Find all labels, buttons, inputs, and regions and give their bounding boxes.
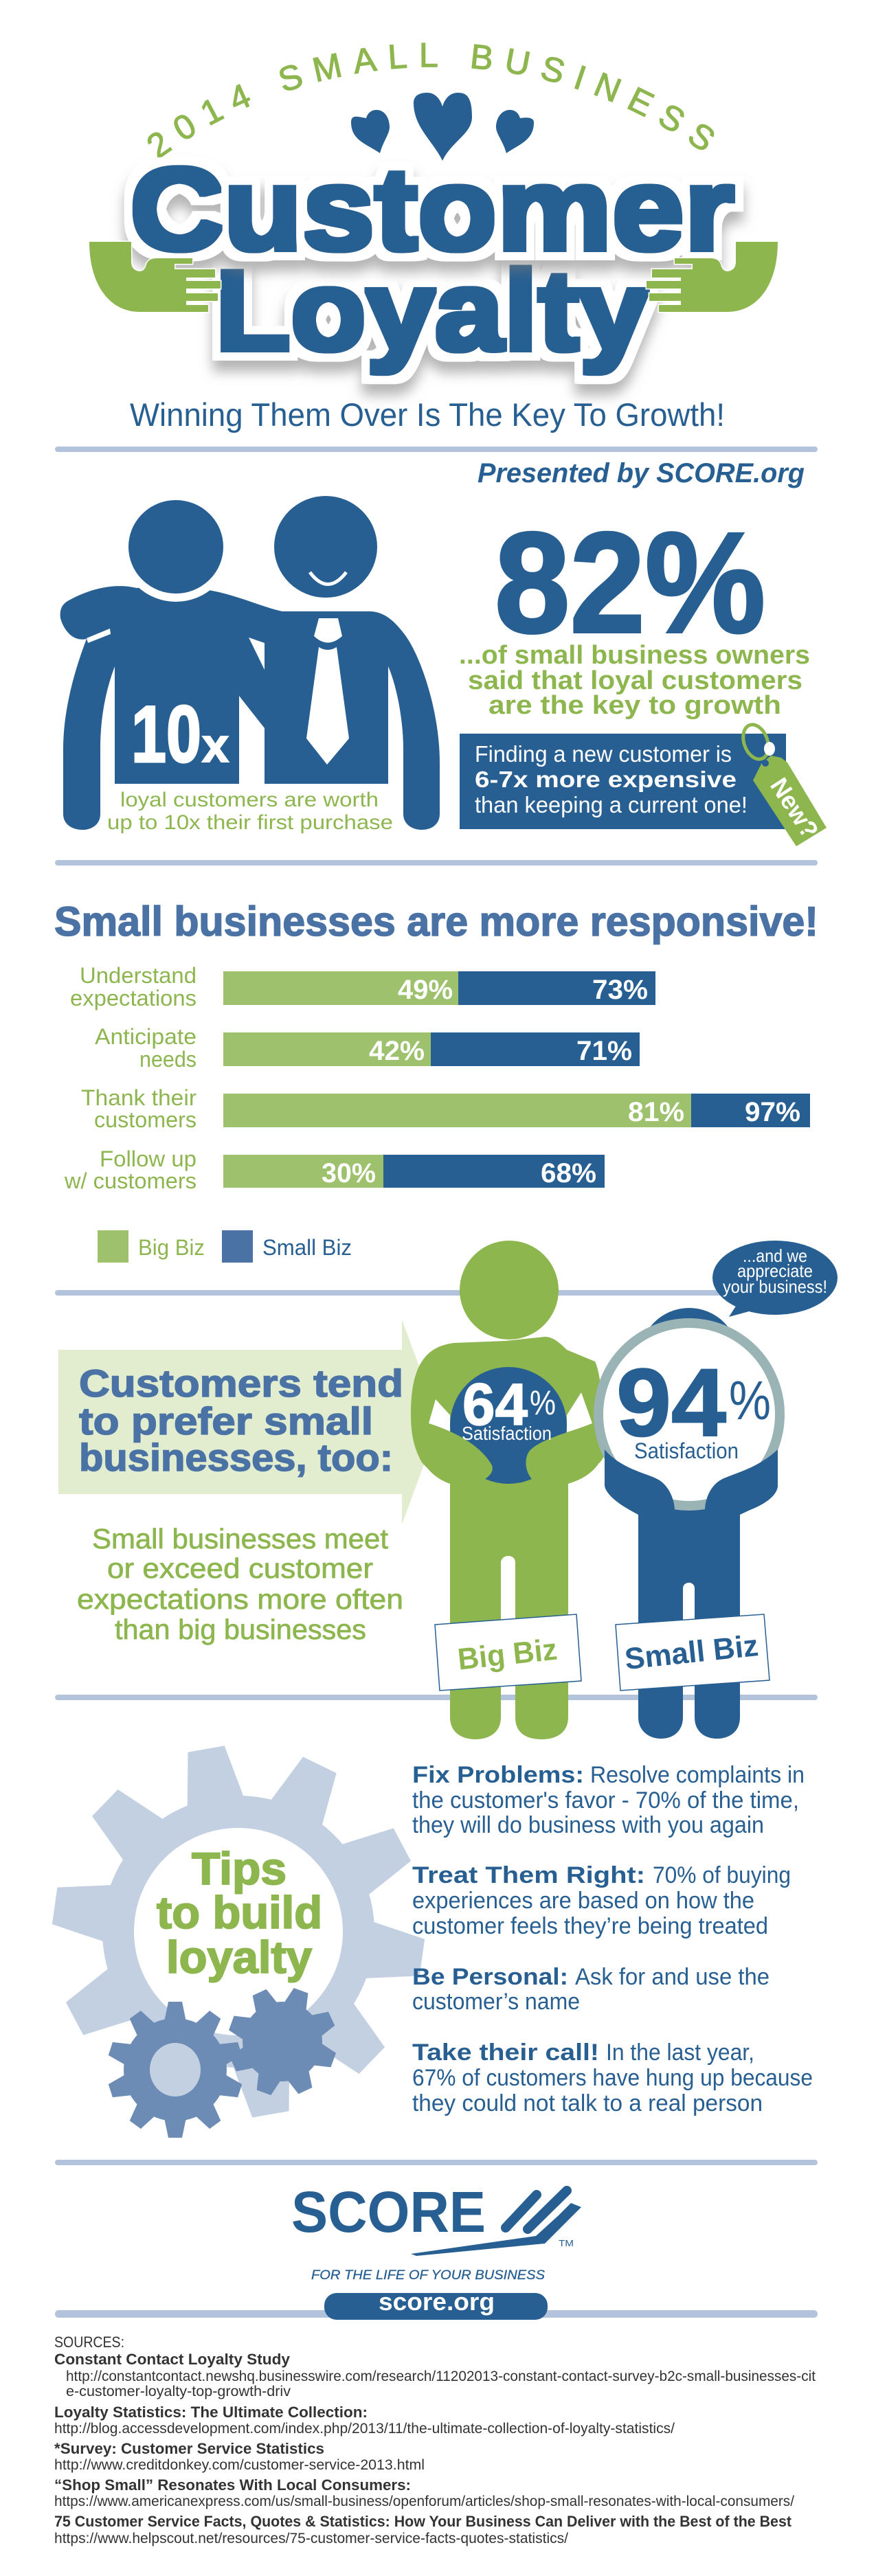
callout: cost of a new customer: 6-7x more expensive bbox=[475, 767, 737, 792]
dividers bbox=[55, 447, 818, 2318]
sign: small biz: Small Biz bbox=[623, 1629, 760, 1676]
caption: 10x: up to 10x their first purchase bbox=[107, 811, 393, 834]
icon: two business people bbox=[60, 496, 440, 830]
text block: Small businesses meet bbox=[92, 1523, 389, 1555]
tip: treat them right: 70% of buying bbox=[653, 1862, 791, 1888]
arc heading: 2014 small business: 2014 SMALL BUSINESS bbox=[147, 43, 715, 158]
icon: new tag bbox=[739, 721, 827, 846]
legend: Small Biz bbox=[262, 1235, 352, 1260]
tip: treat them right: customer feels they’re being treated bbox=[412, 1913, 768, 1939]
callout: speech bubble bbox=[712, 1241, 838, 1317]
panel: sources: SOURCES: bbox=[54, 2334, 124, 2351]
panel: sources: http://constantcontact.newshq.businesswire.com/research/11202013-constant-contact-survey-b2c-small-businesses-cit bbox=[66, 2369, 816, 2384]
row: understand expectations bbox=[70, 963, 655, 1010]
text block: or exceed customer bbox=[107, 1552, 373, 1584]
tip: be personal: customer’s name bbox=[412, 1989, 580, 2015]
panel: responsiveness chart bbox=[54, 899, 818, 1263]
stat: 94% bbox=[616, 1348, 771, 1463]
tagline: Winning Them Over Is The Key To Growth! bbox=[130, 396, 725, 433]
panel: sources: http://blog.accessdevelopment.com/index.php/2013/11/the-ultimate-collection-of-loyalty-statistics/ bbox=[54, 2421, 675, 2437]
stat: 64% bbox=[462, 1372, 556, 1444]
heading: Customers tend bbox=[79, 1362, 403, 1405]
figure: small biz bbox=[598, 1308, 780, 1739]
text block: expectations more often bbox=[77, 1583, 403, 1615]
logo tagline: FOR THE LIFE OF YOUR BUSINESS bbox=[311, 2268, 545, 2283]
tip: treat them right: Treat Them Right: bbox=[412, 1862, 645, 1888]
sign: big biz: Big Biz bbox=[456, 1633, 559, 1677]
icon: left hand bbox=[89, 242, 221, 312]
icon: new tag: New? bbox=[765, 773, 824, 844]
row: follow up: 68% bbox=[541, 1158, 596, 1188]
panel: sources: Constant Contact Loyalty Study bbox=[54, 2351, 291, 2368]
panel: sources: http://www.creditdonkey.com/customer-service-2013.html bbox=[54, 2457, 425, 2473]
tip: be personal: Ask for and use the bbox=[575, 1964, 770, 1990]
row: thank their customers: Thank their bbox=[81, 1085, 196, 1110]
caption: 10x: loyal customers are worth bbox=[120, 789, 379, 811]
text block bbox=[77, 1523, 403, 1645]
panel: sources: https://www.americanexpress.com/us/small-business/openforum/articles/shop-small-resonates-with-local-consumers/ bbox=[54, 2494, 794, 2509]
panel: tips bbox=[51, 1744, 813, 2138]
heading: businesses, too: bbox=[79, 1436, 393, 1479]
caption: 82% bbox=[459, 641, 810, 720]
url pill bbox=[324, 2287, 548, 2320]
tip: take their call bbox=[412, 2040, 813, 2116]
icon: logo strokes bbox=[411, 2191, 581, 2256]
panel: SCORE logo bbox=[291, 2180, 581, 2320]
tip: fix problems: Fix Problems: bbox=[412, 1762, 584, 1788]
caption: 10x bbox=[107, 789, 393, 834]
row: thank their customers bbox=[81, 1085, 810, 1132]
row: follow up: w/ customers bbox=[64, 1168, 196, 1193]
title: Customer Loyalty: Customer bbox=[130, 144, 734, 275]
title: Customer Loyalty: Loyalty bbox=[215, 247, 648, 374]
row: understand expectations: 49% bbox=[398, 975, 453, 1005]
heading: to prefer small bbox=[79, 1399, 373, 1443]
caption: 82%: said that loyal customers bbox=[468, 666, 802, 695]
row: anticipate needs: needs bbox=[139, 1047, 196, 1072]
panel: two people 10x bbox=[60, 496, 440, 834]
row: anticipate needs: Anticipate bbox=[95, 1024, 196, 1049]
row: thank their customers: 81% bbox=[628, 1097, 684, 1127]
heading: tips to build loyalty: to build bbox=[157, 1887, 322, 1938]
callout: cost of a new customer: Finding a new customer is bbox=[475, 741, 732, 767]
legend: Big Biz bbox=[138, 1235, 205, 1260]
tip: be personal bbox=[412, 1964, 770, 2015]
callout: speech bubble: ...and we bbox=[743, 1245, 807, 1266]
stat: 10x: 10 bbox=[131, 689, 201, 779]
panel: 82 percent bbox=[459, 504, 827, 846]
title: Customer Loyalty bbox=[130, 144, 734, 374]
row: follow up: 30% bbox=[322, 1158, 376, 1188]
row: thank their customers: 97% bbox=[745, 1097, 800, 1127]
row: thank their customers: customers bbox=[94, 1107, 196, 1132]
tip: take their call: 67% of customers have hung up because bbox=[412, 2065, 813, 2091]
panel: customers prefer small businesses bbox=[58, 1241, 838, 1739]
row: anticipate needs: 42% bbox=[369, 1036, 425, 1066]
trademark: TM bbox=[559, 2238, 574, 2248]
row: understand expectations: expectations bbox=[70, 986, 196, 1010]
tip: be personal: Be Personal: bbox=[412, 1964, 568, 1990]
icon: small gears bbox=[107, 1987, 337, 2138]
callout: speech bubble: appreciate bbox=[737, 1261, 813, 1281]
row: anticipate needs: 71% bbox=[576, 1036, 632, 1066]
icon: right hand bbox=[647, 242, 778, 312]
tip: fix problems: Resolve complaints in bbox=[590, 1762, 805, 1788]
tip: fix problems: the customer's favor - 70% of the time, bbox=[412, 1787, 799, 1814]
sign: small biz bbox=[616, 1614, 770, 1691]
stat: 10x: x bbox=[202, 719, 229, 772]
stat: 94%: 94 bbox=[616, 1348, 726, 1456]
tip: fix problems: they will do business with you again bbox=[412, 1812, 764, 1838]
heading: tips to build loyalty: loyalty bbox=[166, 1932, 312, 1982]
icon: three hearts bbox=[351, 93, 534, 161]
heading: Small businesses are more responsive! bbox=[54, 899, 818, 945]
text block: than big businesses bbox=[115, 1614, 366, 1645]
panel: sources bbox=[54, 2334, 816, 2546]
panel: sources: “Shop Small” Resonates With Local Consumers: bbox=[54, 2476, 411, 2494]
presented by: Presented by SCORE.org bbox=[478, 458, 805, 488]
legend bbox=[98, 1230, 352, 1263]
caption: 82%: ...of small business owners bbox=[459, 641, 810, 670]
row: understand expectations: Understand bbox=[80, 963, 196, 988]
row: anticipate needs bbox=[95, 1024, 640, 1072]
arrow bbox=[58, 1320, 440, 1524]
heading bbox=[79, 1362, 403, 1479]
tip: take their call: they could not talk to a real person bbox=[412, 2090, 763, 2116]
panel: sources: *Survey: Customer Service Statistics bbox=[54, 2440, 324, 2457]
row: understand expectations: 73% bbox=[592, 975, 648, 1005]
panel: sources: Loyalty Statistics: The Ultimate Collection: bbox=[54, 2404, 368, 2421]
tip: take their call: Take their call! bbox=[412, 2040, 599, 2066]
stat: 94%: Satisfaction bbox=[634, 1438, 739, 1463]
callout: cost of a new customer: than keeping a current one! bbox=[475, 792, 748, 817]
caption: 82%: are the key to growth bbox=[488, 691, 781, 720]
callout: speech bubble: your business! bbox=[723, 1276, 827, 1297]
stat: 64%: Satisfaction bbox=[462, 1423, 552, 1444]
logo wordmark: SCORE bbox=[291, 2180, 486, 2244]
tip: take their call: In the last year, bbox=[606, 2040, 754, 2066]
tip: treat them right: experiences are based on how the bbox=[412, 1888, 754, 1914]
panel: sources: e-customer-loyalty-top-growth-driv bbox=[66, 2384, 291, 2399]
url pill: score.org bbox=[379, 2287, 495, 2316]
row: follow up bbox=[64, 1146, 605, 1193]
callout: cost of a new customer bbox=[460, 734, 786, 829]
panel: sources: 75 Customer Service Facts, Quotes & Statistics: How Your Business Can Deliver with the Best of the Best bbox=[54, 2513, 792, 2530]
stat: 94%: % bbox=[729, 1370, 771, 1431]
panel: sources: https://www.helpscout.net/resources/75-customer-service-facts-quotes-statistics/ bbox=[54, 2531, 568, 2546]
icon: big gear bbox=[51, 1744, 426, 2119]
heading: tips to build loyalty bbox=[157, 1843, 322, 1982]
stat: 64%: % bbox=[530, 1383, 556, 1422]
figure: big biz bbox=[411, 1241, 605, 1739]
heading: tips to build loyalty: Tips bbox=[192, 1843, 287, 1894]
tip: treat them right bbox=[412, 1862, 791, 1939]
tip: fix problems bbox=[412, 1762, 805, 1838]
stat: 82%: 82% bbox=[495, 504, 765, 663]
header bbox=[89, 43, 778, 433]
stat: 64%: 64 bbox=[462, 1372, 528, 1438]
row: follow up: Follow up bbox=[100, 1146, 196, 1171]
sign: big biz bbox=[435, 1614, 581, 1691]
